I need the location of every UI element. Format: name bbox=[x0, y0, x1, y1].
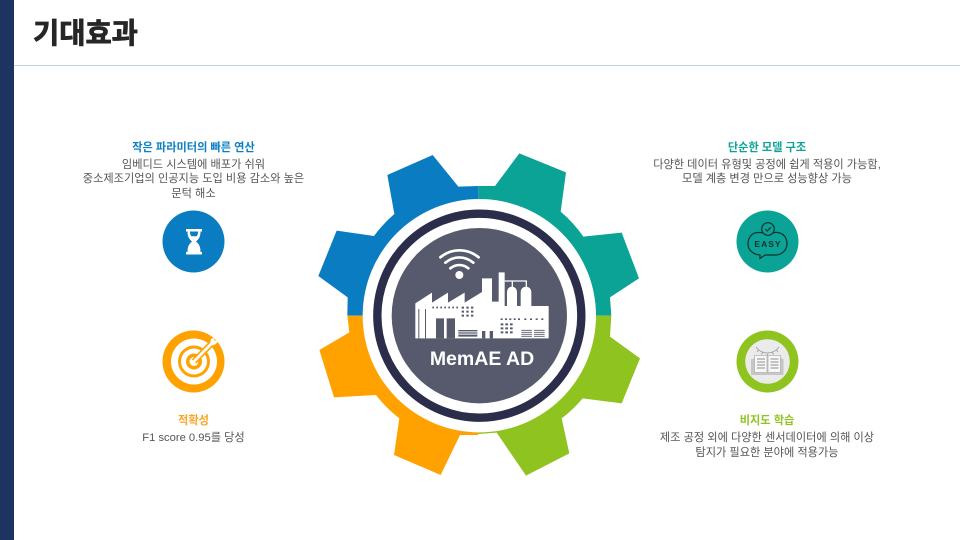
grey hub bbox=[392, 228, 567, 403]
text block: small parameters: 임베디드 시스템에 배포가 쉬워 bbox=[122, 158, 265, 170]
text block: unsupervised learning: 탐지가 필요한 분야에 적용가능 bbox=[695, 447, 839, 459]
text block: small parameters: 작은 파라미터의 빠른 연산 bbox=[132, 142, 255, 154]
text block: small parameters: 중소제조기업의 인공지능 도입 비용 감소와 높은 bbox=[83, 173, 304, 185]
gear segment: orange bbox=[319, 316, 478, 475]
white inner disc bbox=[363, 199, 596, 432]
icon: target with arrow bbox=[162, 330, 224, 392]
icon: hourglass bbox=[162, 210, 224, 272]
header divider bbox=[14, 65, 960, 66]
dark ring bbox=[377, 214, 581, 418]
text block: unsupervised learning bbox=[660, 414, 874, 459]
text block: unsupervised learning: 비지도 학습 bbox=[740, 415, 794, 427]
text block: simple model structure: 다양한 데이터 유형및 공정에 쉽게 적용이 가능함, bbox=[653, 158, 881, 170]
text block: small parameters: 문턱 해소 bbox=[171, 188, 216, 200]
title: 기대효과 bbox=[33, 18, 138, 50]
icon: easy speech bubble: EASY bbox=[754, 239, 782, 249]
icon: book with closed eye bbox=[736, 330, 798, 392]
gear segment: teal bbox=[478, 153, 639, 316]
text block: unsupervised learning: 제조 공정 외에 다양한 센서데이터에 의해 이상 bbox=[660, 432, 874, 444]
gear segment: blue bbox=[318, 155, 478, 316]
text block: accuracy: 적확성 bbox=[178, 415, 209, 427]
text block: simple model structure bbox=[653, 141, 881, 185]
text block: simple model structure: 단순한 모델 구조 bbox=[728, 142, 806, 154]
hub label: MemAE AD bbox=[430, 348, 534, 370]
gear segment: green bbox=[478, 316, 640, 476]
central gear diagram bbox=[318, 153, 640, 476]
icon: factory bbox=[415, 272, 549, 338]
icon: wifi signal bbox=[440, 250, 479, 279]
text block: simple model structure: 모델 계층 변경 만으로 성능향상 가능 bbox=[682, 173, 852, 185]
text block: small parameters bbox=[83, 141, 304, 200]
icon: easy speech bubble bbox=[736, 210, 798, 272]
text block: accuracy bbox=[142, 414, 245, 444]
left navy sidebar bbox=[0, 0, 14, 540]
text block: accuracy: F1 score 0.95를 당성 bbox=[142, 432, 245, 444]
